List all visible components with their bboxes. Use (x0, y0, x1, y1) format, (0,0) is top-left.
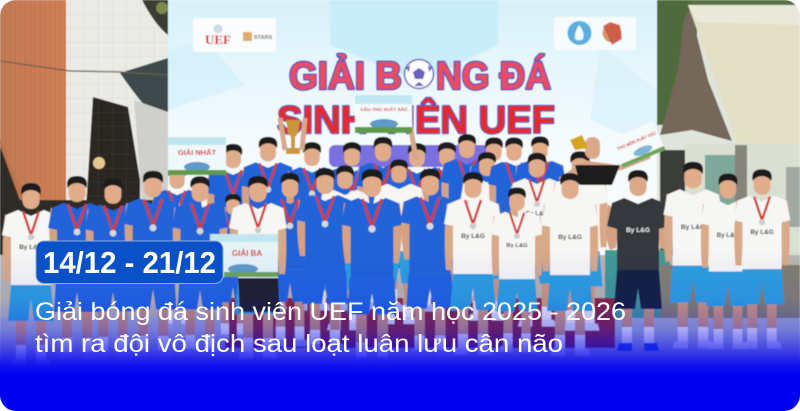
sign: tilted prize board: THỦ MÔN XUẤT SẮC (616, 130, 657, 151)
front row: blue team centre (296, 168, 460, 365)
front row: coach in white with black shorts (229, 176, 287, 359)
sign: first prize: GIẢI NHẤT (178, 147, 217, 157)
trophy (280, 118, 305, 154)
sign: third prize (210, 234, 278, 277)
purple date strip (329, 145, 494, 167)
icon: football (404, 60, 434, 88)
front row: right white players (663, 162, 790, 349)
date badge: 14/12 - 21/12 (43, 245, 216, 280)
wire (0, 61, 168, 75)
front row: blue team (48, 171, 228, 359)
sign: best player (355, 95, 412, 133)
front row: white and sky team (444, 172, 599, 356)
seats and banner behind the legs (0, 250, 800, 320)
right scene: tin roof (688, 5, 800, 145)
back row players (151, 134, 608, 347)
banner title: GIẢI B (289, 54, 402, 98)
sign: first prize (168, 137, 226, 175)
background: orange corrugated wall (0, 0, 67, 300)
headline: tìm ra đội vô địch sau loạt luân lưu cân não (35, 330, 563, 358)
logo panel right (554, 17, 636, 50)
banner title: SINH VIÊN UEF (277, 98, 555, 142)
ground (0, 318, 800, 411)
background: white building wall (66, 0, 169, 240)
background: dark doorway (84, 97, 140, 240)
headline (35, 298, 626, 358)
right scene: trees (657, 0, 800, 300)
sign: best player: CẦU THỦ XUẤT SẮC (360, 105, 408, 113)
person in black raising arm (560, 135, 650, 185)
headline: Giải bóng đá sinh viên UEF năm học 2025 - 2026 (35, 298, 626, 326)
right scene: green walled house (660, 144, 800, 305)
sign: third prize: GIẢI BA (232, 249, 262, 258)
front row: white shirt left (2, 183, 60, 366)
goalkeeper in black (606, 170, 670, 351)
banner backdrop (168, 0, 659, 300)
banner title (277, 54, 555, 142)
logo panel left (193, 18, 276, 52)
right scene: thatched roof (660, 8, 732, 141)
lower dark fence backdrop (0, 200, 168, 260)
goalkeeper in black: By L&G (626, 227, 650, 234)
logo panel left: STARS (254, 35, 272, 41)
sign: tilted prize board (611, 121, 665, 168)
banner title: NG ĐÁ (436, 54, 551, 98)
blue gradient overlay (0, 250, 800, 375)
raised arm (409, 117, 416, 160)
logo panel left: UEF (205, 32, 231, 47)
